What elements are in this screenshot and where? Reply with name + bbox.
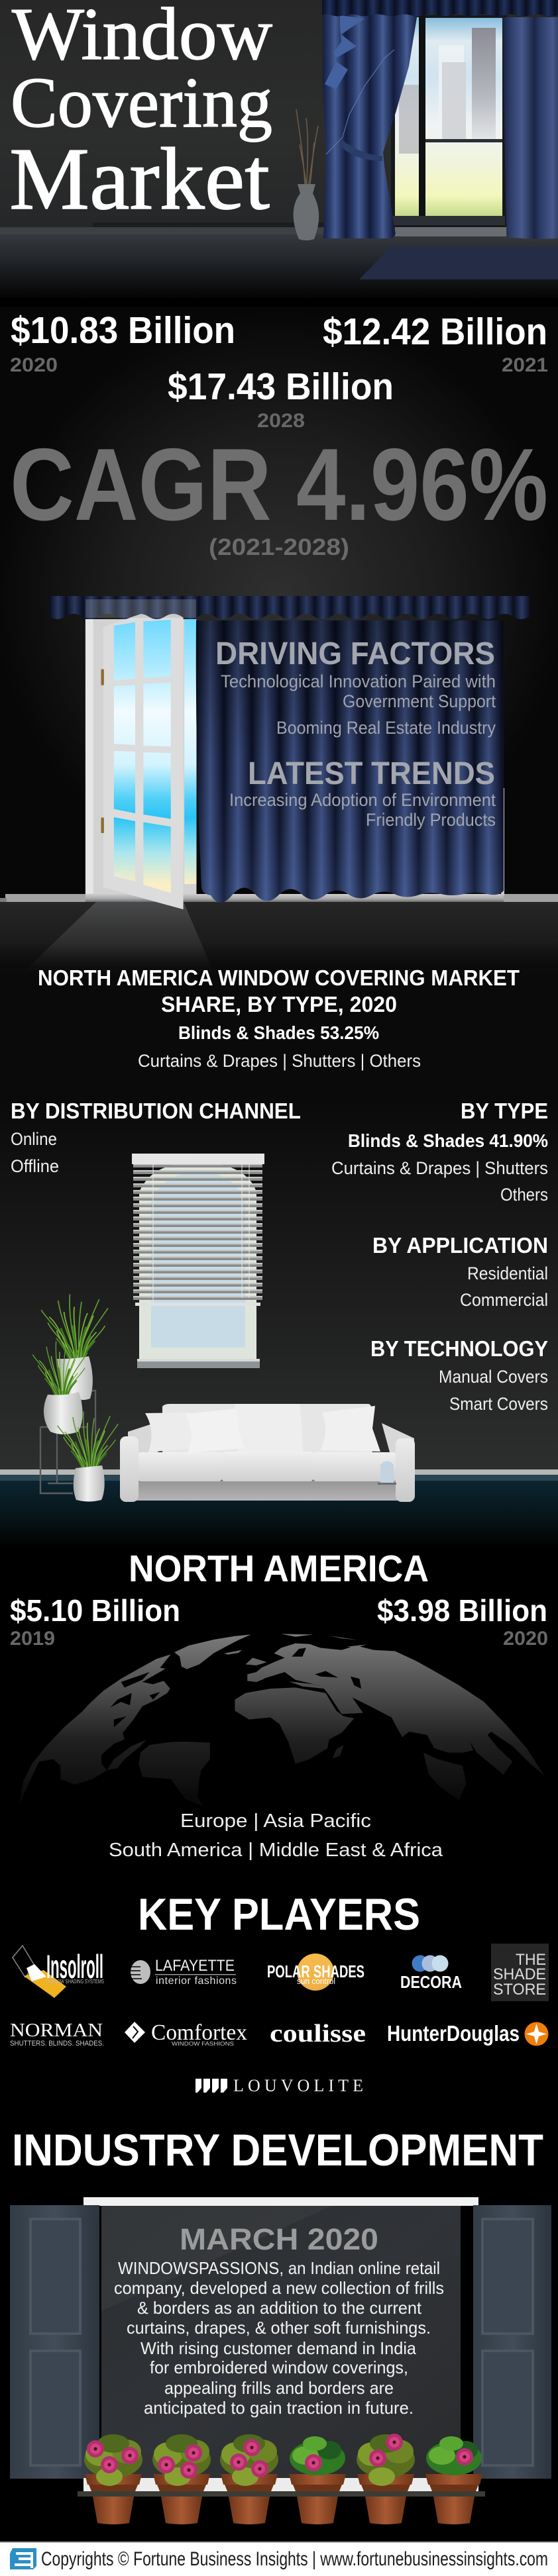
logo: Lafayette: interior fashions [156,1975,237,1987]
segment: by type: BY TYPE [461,1099,548,1123]
logo: The Shade Store: STORE [493,1981,546,1999]
illustration: window sill and shelf [78,2478,485,2497]
text: type share [138,1022,421,1071]
text: latest trends list: Increasing Adoption of Environment [229,790,496,810]
stat: 2028 value: 2028 [257,410,305,432]
logo: Norman: SHUTTERS. BLINDS. SHADES. [10,2040,104,2048]
title [9,0,272,228]
logo: Polar Shades: sun control [297,1976,335,1986]
logo: Insolroll: WINDOW SHADING SYSTEMS [46,1979,104,1985]
stat: 2019 value [10,1593,180,1650]
text: latest trends list: Friendly Products [366,810,496,830]
heading: north america share [38,966,520,1016]
illustration: tiny window on sofa [378,1461,396,1485]
title: Market [9,130,270,228]
segment: by distribution channel: Online [11,1129,57,1149]
text: type share: Blinds & Shades 53.25% [178,1022,379,1043]
logo: Polar Shades: POLAR SHADES [267,1961,364,1981]
illustration: flower pot five [357,2434,415,2524]
logo: The Shade Store: THE [516,1951,546,1969]
illustration: flower pot three [220,2434,278,2524]
heading: key players: KEY PLAYERS [138,1889,420,1940]
illustration: right curtain [503,17,558,239]
stat: 2021 value: 2021 [502,354,548,376]
illustration: flower pot two [152,2434,211,2524]
segment: by technology: Smart Covers [449,1394,548,1414]
illustration: rug [359,246,558,279]
text: driving factors list: Technological Innovation Paired with [221,671,496,691]
logo: Decora: DECORA [400,1972,462,1992]
illustration: floor [0,902,558,981]
illustration: floor light from door [22,902,214,973]
heading: march 2020: MARCH 2020 [180,2222,378,2256]
text: latest trends list [229,790,496,830]
illustration: sofa [120,1404,415,1502]
text: driving factors list: Government Support [343,691,496,711]
segment: by technology [370,1336,548,1414]
logo: Lafayette [131,1957,237,1987]
logo: Comfortex: Comfortex [151,2020,247,2045]
segment: by type: Blinds & Shades 41.90% [348,1130,548,1151]
logo: Norman [10,2020,104,2048]
stat: 2020 value: 2020 [503,1628,548,1650]
illustration: flower pot six [425,2436,482,2524]
logo: The Shade Store: SHADE [493,1965,546,1983]
segment: by technology: BY TECHNOLOGY [370,1336,548,1361]
text: development description: for embroidered window coverings, [150,2357,408,2377]
segment: by application: Residential [467,1263,548,1283]
logo: Comfortex: WINDOW FASHIONS [172,2040,234,2047]
text: driving factors list [221,671,496,738]
stat: 2028 value: $17.43 Billion [168,366,394,408]
illustration: curtain valance [49,596,530,619]
segment: by application [372,1233,548,1310]
stat: 2020 value [10,309,235,376]
text: development description: company, developed a new collection of frills [114,2278,444,2298]
illustration: window pane [84,2197,478,2479]
panel: north america regional [10,1548,548,1861]
illustration: plant three [58,1412,118,1502]
logo: Louvolite: LOUVOLITE [233,2076,363,2095]
stat: 2019 value: 2019 [10,1628,55,1650]
stat: 2028 value [168,366,394,432]
illustration: left curtain [323,13,418,238]
segment: by distribution channel [11,1099,301,1176]
logo: Norman: NORMAN [10,2020,103,2041]
logo: Lafayette: LAFAYETTE [155,1957,235,1975]
illustration: open door [85,599,196,909]
stat: 2019 value: $5.10 Billion [10,1593,180,1628]
text: development description: appealing frills and borders are [164,2378,394,2398]
stat: 2020 value: $10.83 Billion [11,309,235,352]
stat: 2020 value: 2020 [10,354,58,376]
illustration: vase and twigs [294,109,319,240]
illustration: world globe [20,1634,545,1806]
heading: driving factors: DRIVING FACTORS [215,636,495,671]
text: other regions: Europe | Asia Pacific [180,1810,371,1832]
segment: by type: Curtains & Drapes | Shutters [331,1158,548,1178]
heading: north america: NORTH AMERICA [129,1548,429,1590]
text: other regions [109,1810,443,1861]
logo: The Shade Store [491,1944,549,2001]
panel: market size and CAGR [0,307,558,1128]
segment: by type [331,1099,548,1205]
text: development description: & borders as an addition to the current [137,2298,422,2318]
text: development description: anticipated to gain traction in future. [144,2398,414,2418]
illustration: curtain valance [322,0,558,16]
illustration: plant one [41,1295,108,1400]
text: type share: Curtains & Drapes | Shutters | Others [138,1051,421,1071]
text: other regions: South America | Middle East & Africa [109,1840,443,1861]
heading: latest trends: LATEST TRENDS [248,756,495,791]
stat: 2021 value: $12.42 Billion [323,311,547,353]
text: development description [114,2258,444,2418]
logo: Hunter Douglas: HunterDouglas [387,2021,520,2046]
logo: Coulisse: coulisse [270,2020,366,2048]
illustration: left shutter [10,2205,99,2479]
logo: Polar Shades [267,1954,364,1991]
logo: Decora [400,1955,462,1992]
segment: by application: Commercial [460,1290,548,1310]
panel: footer [0,2542,558,2576]
stat: 2021 value [323,311,548,376]
panel: hero [0,0,558,298]
panel: segmentation room [0,966,558,1544]
illustration: long curtain [196,620,504,903]
segment: by technology: Manual Covers [439,1367,548,1387]
text: development description: WINDOWSPASSIONS, an Indian online retail [118,2258,440,2278]
stat: 2020 value [377,1593,548,1650]
illustration: right shutter [473,2205,551,2479]
illustration: plant stand [40,1391,95,1493]
illustration: window with blinds [132,1154,264,1368]
stat: 2020 value: $3.98 Billion [377,1593,547,1628]
segment: by distribution channel: BY DISTRIBUTION CHANNEL [11,1099,301,1123]
panel: key players: Insolroll [46,1948,103,1985]
icon: Fortune Business Insights logo [10,2548,36,2569]
segment: by type: Others [500,1185,548,1205]
segment: by distribution channel: Offline [11,1156,59,1176]
title: Covering [11,64,272,142]
segment: by application: BY APPLICATION [372,1233,548,1258]
text: development description: curtains, drapes, & other soft furnishings. [127,2318,431,2338]
heading: north america share: SHARE, BY TYPE, 2020 [161,992,397,1016]
panel: driving factors and trends [0,596,558,981]
stat: CAGR: (2021-2028) [209,534,349,560]
illustration: flower pot one [84,2434,142,2524]
text: development description: With rising customer demand in India [140,2338,417,2358]
panel: industry development window [10,2197,551,2524]
illustration: window with city view [391,15,507,236]
panel: key players [10,1889,549,2095]
illustration: sill strip [0,788,558,902]
logo: Insolroll [13,1946,104,1998]
text: driving factors list: Booming Real Estate Industry [276,718,496,738]
illustration: plant two [33,1342,87,1434]
illustration: flower pot four [289,2436,346,2524]
heading: north america share: NORTH AMERICA WINDOW COVERING MARKET [38,966,520,990]
